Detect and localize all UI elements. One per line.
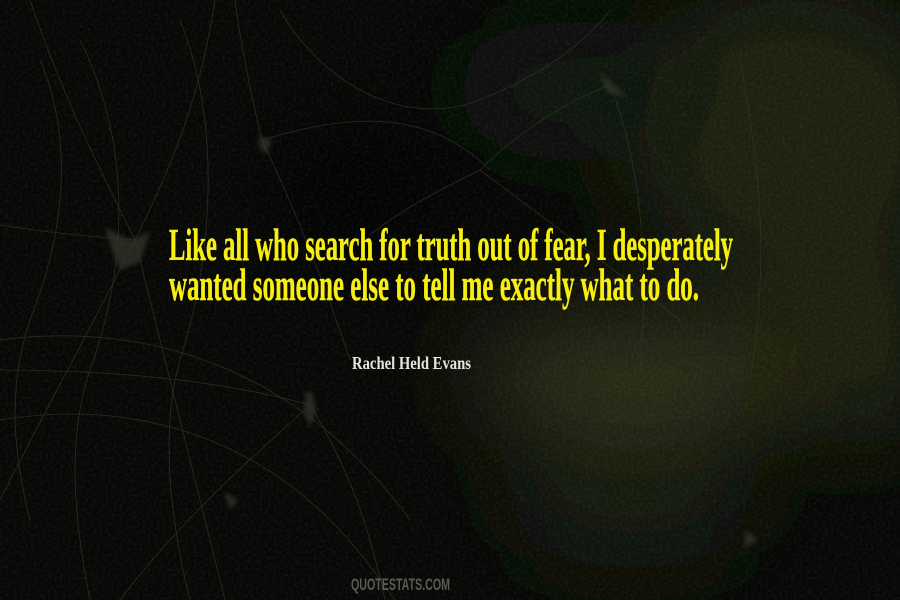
decoration: web debris specks bbox=[105, 72, 758, 548]
watermark: QUOTESTATS.COM bbox=[351, 575, 450, 594]
author name: Rachel Held Evans bbox=[352, 353, 471, 373]
quote text bbox=[169, 220, 733, 310]
